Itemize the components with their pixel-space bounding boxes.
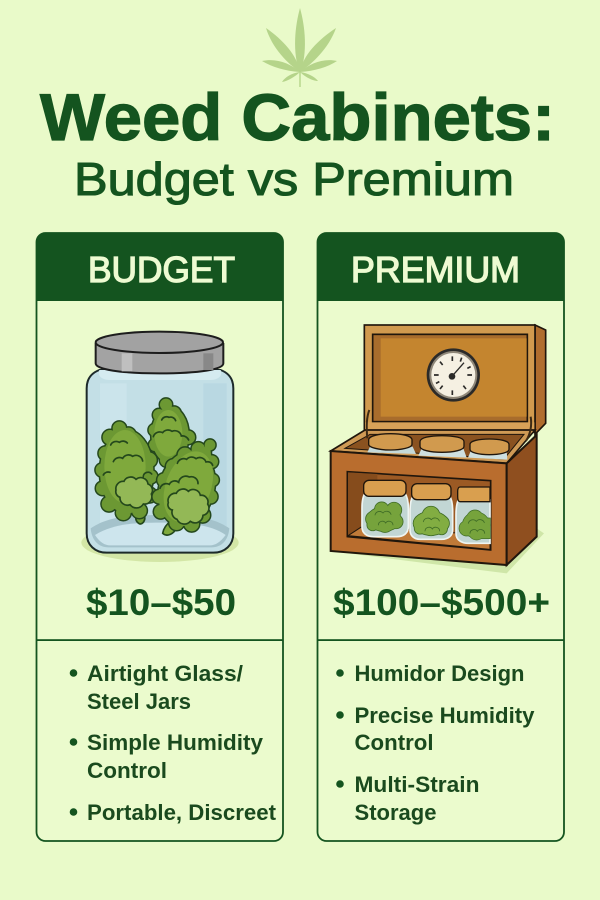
budget feature: airtight jars: Steel Jars [87, 689, 191, 714]
budget feature: humidity control [70, 730, 263, 783]
humidor lid [364, 325, 546, 434]
budget feature: airtight jars [70, 661, 244, 714]
premium feature: multi-strain: Storage [354, 800, 436, 825]
humidity gauge [427, 348, 480, 402]
humidor box front [331, 435, 537, 565]
bud: top [149, 399, 195, 467]
panel: budget [36, 233, 283, 841]
premium feature: multi-strain [336, 772, 480, 825]
premium feature: humidor design: Humidor Design [354, 661, 524, 686]
panel: premium [317, 233, 564, 841]
budget header: BUDGET [88, 249, 235, 290]
premium header: PREMIUM [351, 249, 520, 290]
premium price: $100–$500+ [333, 582, 550, 623]
premium feature: precise humidity: Precise Humidity [354, 703, 535, 728]
budget header [36, 233, 283, 301]
upper jars [367, 434, 509, 460]
budget feature: humidity control: Control [87, 758, 167, 783]
bud: left [96, 422, 157, 524]
lower jars [362, 480, 490, 543]
premium feature: precise humidity: Control [354, 730, 434, 755]
subtitle: Budget vs Premium [74, 153, 514, 205]
premium feature: multi-strain: Multi-Strain [354, 772, 480, 797]
jar lid [96, 332, 223, 373]
budget feature: airtight jars: Airtight Glass/ [87, 661, 244, 686]
icon: wooden humidor [330, 325, 546, 573]
budget feature: humidity control: Simple Humidity [87, 730, 263, 755]
humidor box top [331, 430, 535, 463]
budget feature: portable: Portable, Discreet [87, 800, 276, 825]
icon: cannabis leaf [262, 8, 337, 87]
budget price: $10–$50 [86, 582, 236, 623]
premium header [317, 233, 564, 301]
premium feature: precise humidity [336, 703, 535, 755]
title: Weed Cabinets: [40, 80, 555, 154]
bud: right [150, 440, 223, 535]
icon: glass jar with buds [81, 332, 239, 562]
